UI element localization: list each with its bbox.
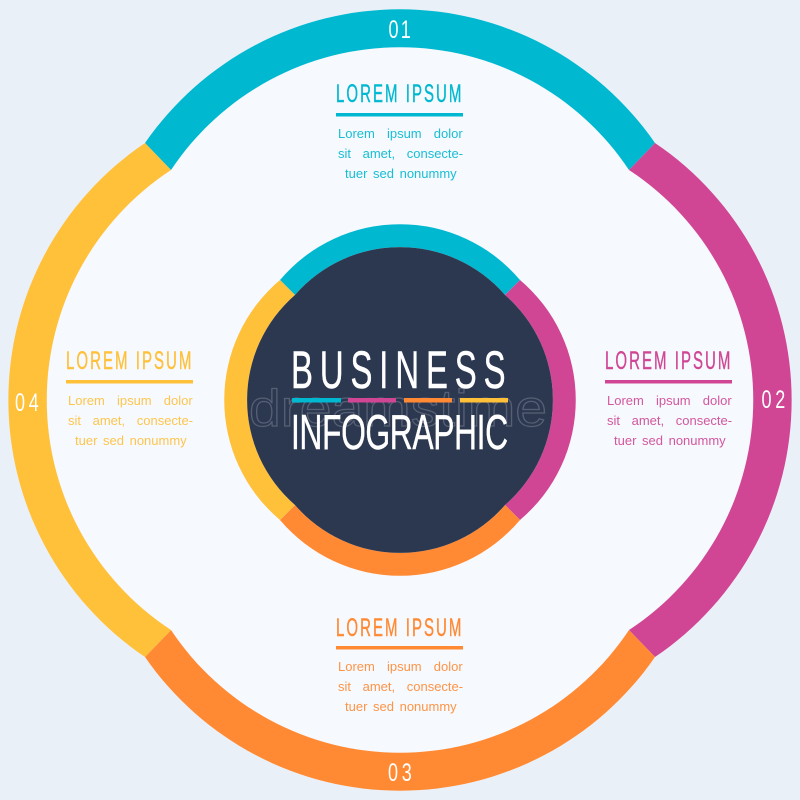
body 02: sit amet, consecte- [607, 413, 732, 428]
segment 01 [145, 9, 655, 170]
heading 04: LOREM IPSUM [66, 347, 191, 375]
title color bars [292, 398, 508, 402]
body 01: tuer sed nonummy [345, 166, 457, 181]
inner ring left [224, 280, 295, 520]
dark core [247, 247, 553, 553]
body 01: Lorem ipsum dolor [338, 126, 463, 141]
body 04: Lorem ipsum dolor [68, 393, 193, 408]
inner ring right [505, 280, 576, 520]
body 03: tuer sed nonummy [345, 699, 457, 714]
segment 01: 01 [388, 15, 411, 44]
body 03 [338, 659, 463, 714]
rule 04 [66, 380, 193, 384]
body 02: Lorem ipsum dolor [607, 393, 732, 408]
segment 04: 04 [15, 388, 39, 417]
inner ring top [280, 224, 520, 295]
body 04 [68, 393, 193, 448]
body 03: Lorem ipsum dolor [338, 659, 463, 674]
body 01 [338, 126, 463, 181]
segment 03: 03 [388, 758, 412, 787]
segment 02 [629, 143, 792, 657]
text block 03 [336, 614, 463, 714]
title infographic: INFOGRAPHIC [291, 405, 508, 460]
body 04: tuer sed nonummy [75, 433, 187, 448]
center emblem [224, 224, 576, 576]
heading 02: LOREM IPSUM [605, 347, 730, 375]
text block 04 [66, 347, 193, 448]
segment 02: 02 [762, 385, 785, 414]
body 02 [607, 393, 732, 448]
body 01: sit amet, consecte- [338, 146, 463, 161]
body 04: sit amet, consecte- [68, 413, 193, 428]
segment 04 [8, 143, 171, 657]
rule 03 [336, 646, 463, 650]
rule 01 [336, 113, 463, 116]
watermark: dreamstime [249, 380, 547, 438]
heading 03: LOREM IPSUM [336, 614, 461, 642]
body 03: sit amet, consecte- [338, 679, 463, 694]
segment 03 [145, 630, 655, 791]
text block 02 [605, 347, 732, 448]
rule 02 [605, 380, 732, 384]
text block 01 [336, 80, 463, 181]
heading 01: LOREM IPSUM [336, 80, 461, 108]
title business: BUSINESS [291, 341, 506, 400]
body 02: tuer sed nonummy [614, 433, 726, 448]
inner ring bottom [280, 505, 520, 576]
